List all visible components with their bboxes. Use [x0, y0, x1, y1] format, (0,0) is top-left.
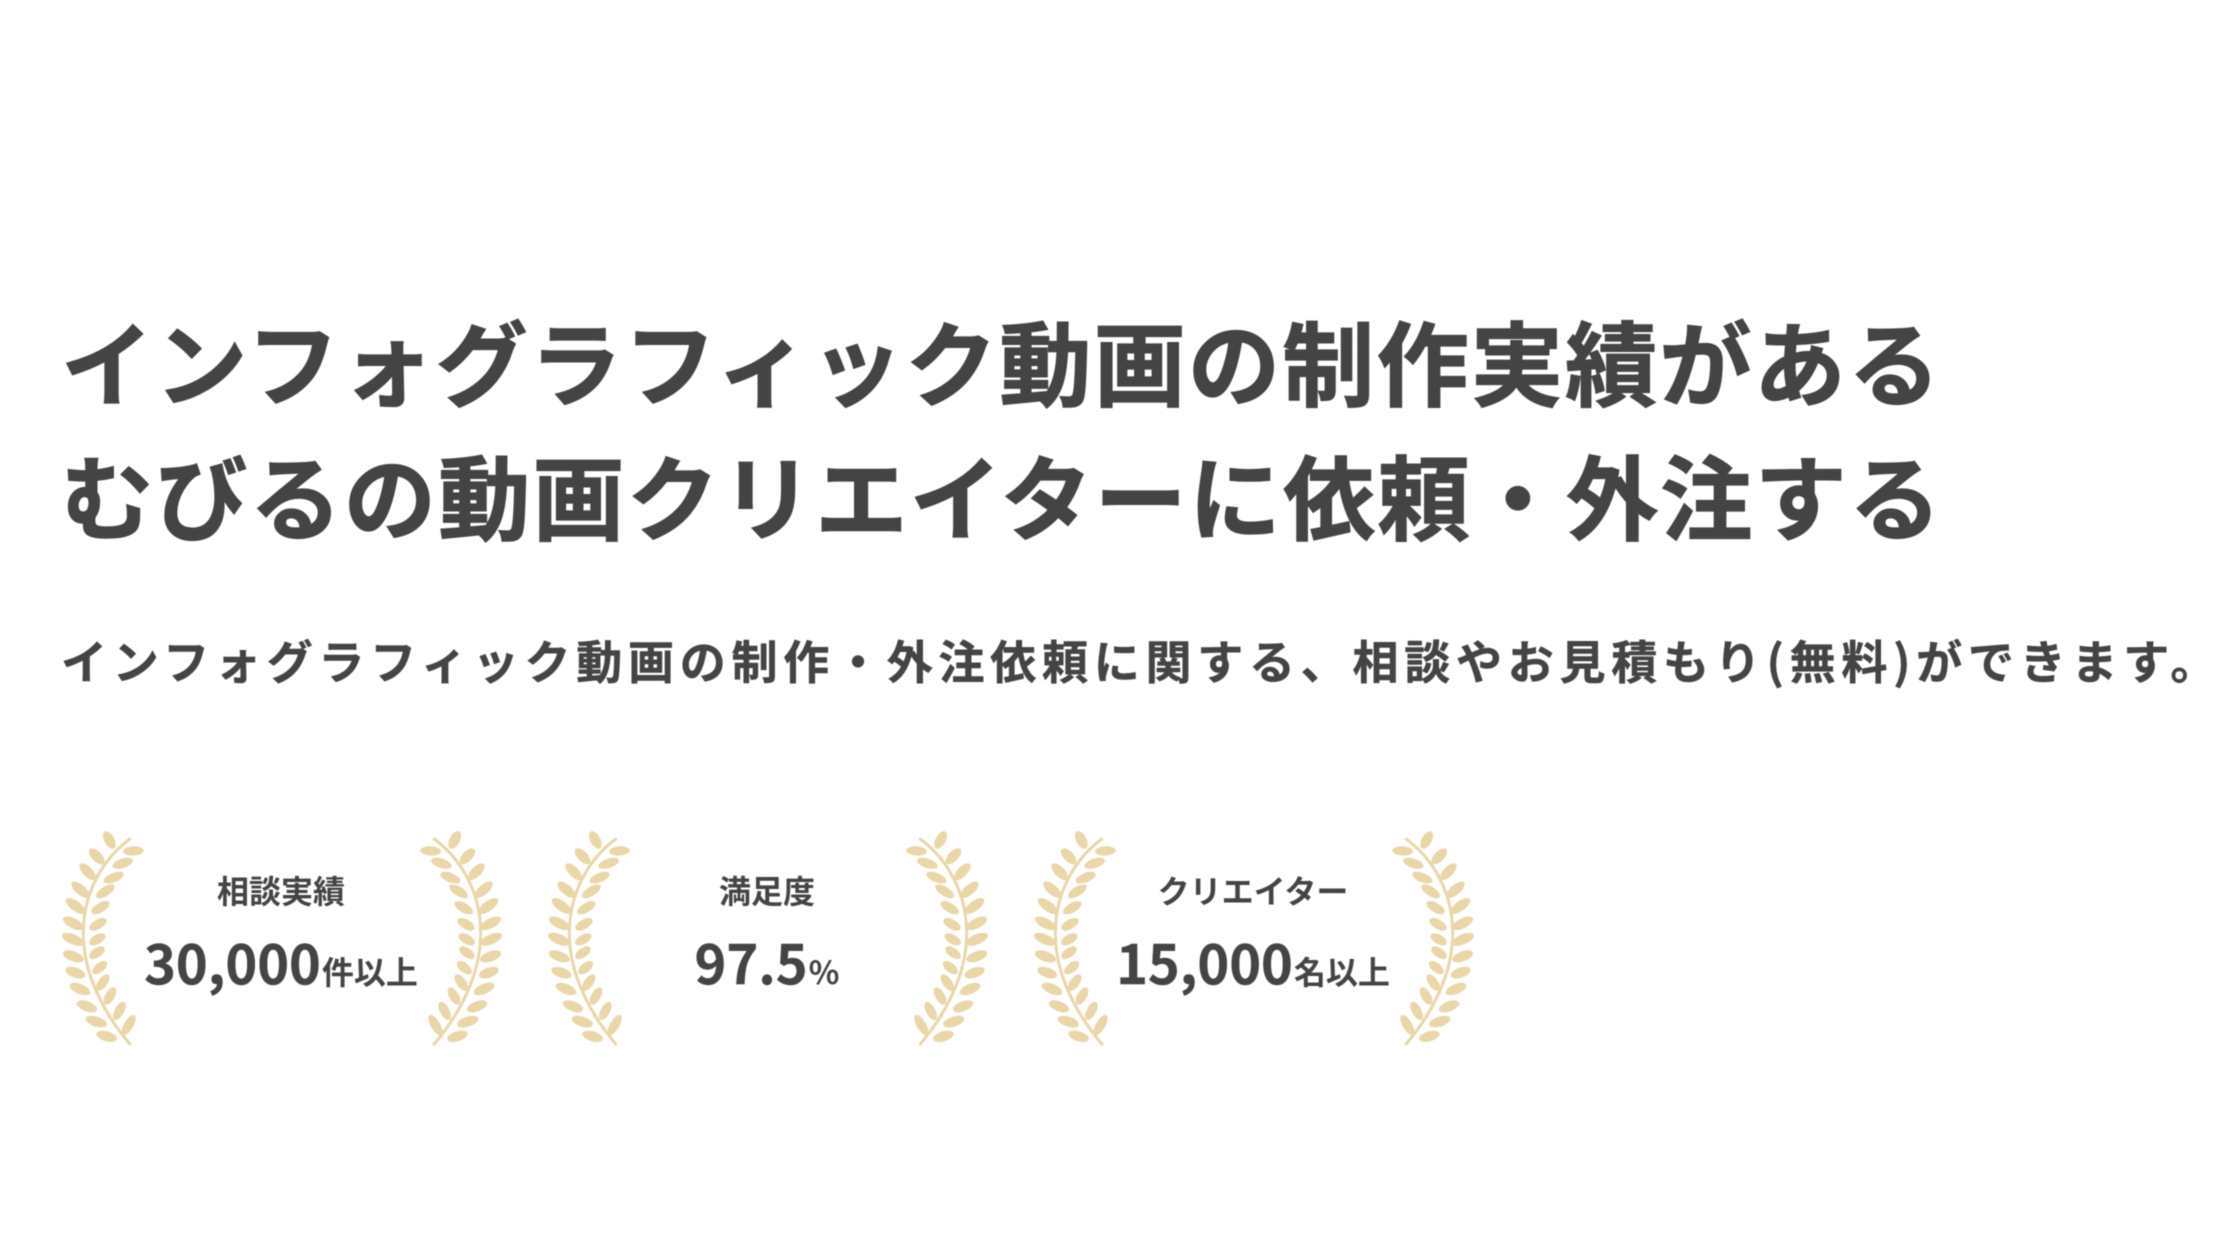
icon: laurel 2 right [906, 829, 990, 1045]
icon: laurel 3 right [1392, 829, 1476, 1045]
subtitle: インフォグラフィック動画の制作・外注依頼に関する、相談やお見積もり(無料)ができます。 [61, 627, 2222, 693]
icon: laurel 1 right [420, 829, 504, 1045]
title line 2: むびるの動画クリエイターに依頼・外注する [61, 427, 1943, 560]
stat value: 30,000件以上 [144, 921, 418, 1000]
stat label: クリエイター [1158, 867, 1348, 913]
stat: satisfaction [695, 867, 840, 1000]
icon: laurel 2 left [546, 829, 630, 1045]
stat value: 97.5% [695, 921, 839, 1000]
icon: laurel 3 left [1032, 829, 1116, 1045]
stat label: 満足度 [719, 867, 815, 913]
stat value: 15,000名以上 [1116, 921, 1390, 1000]
title [61, 293, 1943, 560]
title line 1: インフォグラフィック動画の制作実績がある [61, 293, 1942, 426]
icon: laurel 1 left [60, 829, 144, 1045]
stat: consultations [144, 867, 418, 1000]
stat: creators [1116, 867, 1390, 1000]
stat label: 相談実績 [217, 867, 345, 913]
